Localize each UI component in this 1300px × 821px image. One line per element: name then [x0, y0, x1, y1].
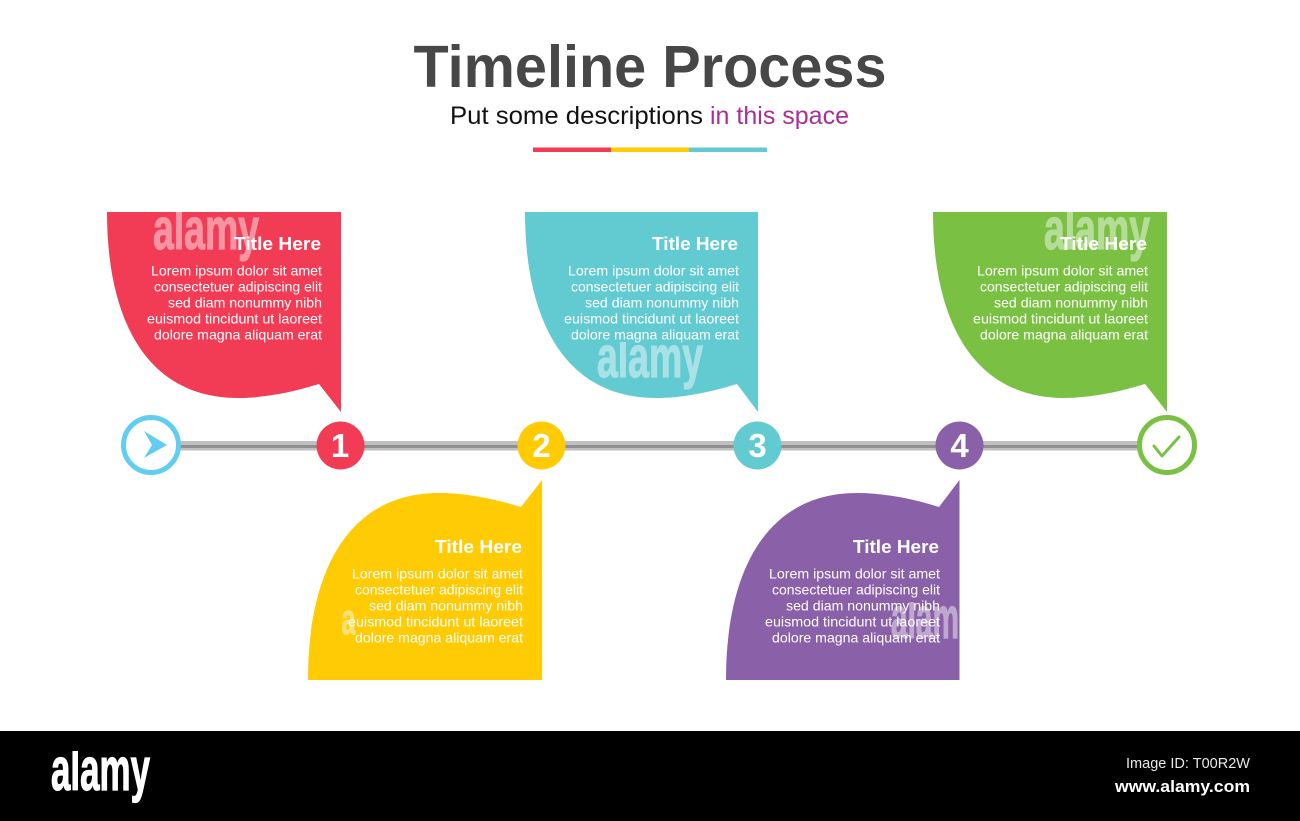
panel: step 3 callout: alamy: [597, 325, 703, 390]
panel: step 4 callout: consectetuer adipiscing elit: [772, 582, 940, 598]
panel: step 3 callout: [525, 212, 758, 412]
subtitle: Put some descriptions: [450, 102, 703, 130]
panel: step 1 callout: alamy: [153, 197, 259, 262]
panel: step 1 callout: euismod tincidunt ut laoreet: [147, 310, 322, 326]
node 1: [316, 422, 364, 470]
subtitle: in this space: [710, 102, 849, 130]
panel: step 2 callout: Title Here: [435, 536, 522, 557]
panel: step 4 callout: dolore magna aliquam erat: [772, 630, 940, 646]
panel: step 1 callout: sed diam nonummy nibh: [168, 294, 322, 310]
panel: step 2 callout: euismod tincidunt ut laoreet: [348, 614, 523, 630]
panel: step 3 callout: consectetuer adipiscing elit: [571, 278, 739, 294]
node 4: 4: [950, 427, 969, 464]
panel: step 3 callout: Title Here: [652, 233, 738, 254]
panel: step 2 callout: dolore magna aliquam erat: [355, 630, 523, 646]
timeline line: [178, 441, 1140, 450]
footer bar: [0, 731, 1300, 821]
panel: step 4 callout: [726, 480, 960, 680]
subtitle: [450, 102, 849, 130]
panel: step 3 callout: dolore magna aliquam erat: [571, 326, 739, 342]
panel: step 3 callout: Lorem ipsum dolor sit amet: [568, 262, 739, 278]
panel: finish callout: dolore magna aliquam erat: [980, 326, 1148, 342]
node 2: [518, 422, 566, 470]
panel: finish callout: [933, 197, 1167, 412]
panel: finish callout: Lorem ipsum dolor sit amet: [977, 262, 1148, 278]
panel: step 2 callout: sed diam nonummy nibh: [369, 598, 523, 614]
website: www.alamy.com: [1114, 777, 1250, 796]
panel: step 2 callout: [308, 480, 542, 680]
title: Timeline Process: [414, 34, 886, 100]
panel: finish callout: alamy: [1044, 197, 1150, 262]
panel: step 1 callout: [107, 197, 341, 412]
panel: step 4 callout: Lorem ipsum dolor sit amet: [769, 566, 940, 582]
icon: start arrow: [124, 418, 178, 472]
node 3: 3: [748, 427, 767, 464]
panel: finish callout: sed diam nonummy nibh: [994, 294, 1148, 310]
panel: finish callout: Title Here: [1060, 233, 1147, 254]
panel: step 1 callout: consectetuer adipiscing elit: [154, 278, 322, 294]
title underline: [533, 148, 767, 152]
node 2: 2: [532, 427, 551, 464]
panel: step 2 callout: a: [342, 595, 356, 644]
node 4: [936, 422, 984, 470]
panel: step 1 callout: Title Here: [234, 233, 321, 254]
node 1: 1: [331, 427, 349, 464]
panel: step 4 callout: Title Here: [853, 536, 939, 557]
footer logo: alamy: [51, 736, 150, 803]
panel: step 2 callout: Lorem ipsum dolor sit amet: [352, 566, 523, 582]
panel: step 2 callout: consectetuer adipiscing elit: [355, 582, 523, 598]
panel: step 3 callout: euismod tincidunt ut laoreet: [564, 310, 739, 326]
panel: step 4 callout: euismod tincidunt ut laoreet: [765, 614, 940, 630]
icon: finish check: [1140, 418, 1194, 472]
panel: step 1 callout: Lorem ipsum dolor sit amet: [151, 262, 322, 278]
panel: step 3 callout: sed diam nonummy nibh: [585, 294, 739, 310]
node 3: [734, 422, 782, 470]
panel: step 4 callout: sed diam nonummy nibh: [786, 598, 940, 614]
panel: finish callout: euismod tincidunt ut laoreet: [973, 310, 1148, 326]
panel: finish callout: consectetuer adipiscing elit: [980, 278, 1148, 294]
panel: step 1 callout: dolore magna aliquam erat: [154, 326, 322, 342]
image id: Image ID: T00R2W: [1126, 755, 1251, 772]
panel: step 4 callout: alam: [891, 586, 959, 651]
